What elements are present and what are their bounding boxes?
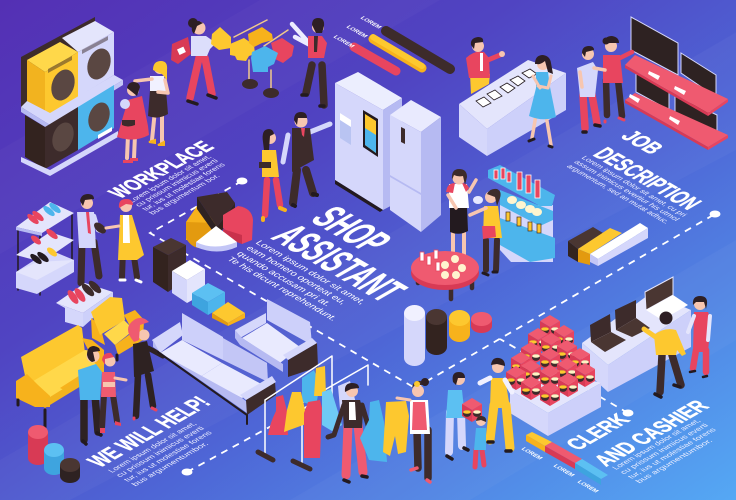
endpoint dots [182, 178, 720, 476]
workplace paragraph: cu prissum inimicus everti [133, 157, 221, 208]
pie chart [186, 192, 253, 252]
shoe salesman and customer [77, 194, 144, 283]
top colour bars with labels [331, 16, 450, 71]
assistant with apron [397, 378, 430, 482]
shoe rack [16, 201, 74, 295]
workplace heading: WORKPLACE [103, 138, 219, 202]
we will help paragraph: cu prissum inimicus everti [114, 425, 207, 479]
TV shelves [625, 17, 728, 150]
shop assistant paragraph: eam homero oporteat eu, [244, 244, 349, 306]
person with bags at clothes rack [171, 18, 231, 104]
dashed connector lines [150, 181, 715, 472]
shop assistant heading: ASSISTANT [261, 218, 416, 308]
helping assistant and couple [78, 318, 163, 444]
shop assistant heading [261, 200, 416, 308]
bottom colour bar with labels: LOREM [575, 480, 599, 494]
clerk group [446, 358, 512, 467]
people: women at washers [117, 61, 168, 163]
workplace paragraph: tur, ius ut molestiae forens [140, 161, 227, 212]
shop assistant paragraph: Lorem ipsum dolor sit amet, [253, 239, 368, 306]
bottom colour bar with labels: LOREM [551, 464, 575, 478]
couple at refrigerators [259, 112, 330, 220]
cashier people [644, 296, 711, 397]
yellow sofa [16, 325, 104, 427]
clerk and cashier paragraph: bus argumentumbor. [633, 437, 715, 485]
we will help paragraph: Lorem ipsum dolor sit amet, [106, 420, 199, 474]
cylinder chart [404, 305, 492, 366]
job description paragraph: assum inimicus evertiur his utmol [572, 159, 682, 222]
job description paragraph: argumentum, sed an mutat adhuc. [565, 163, 672, 225]
job description heading: JOB [616, 126, 669, 158]
clerk and cashier paragraph: cu prissum inimicus everti [618, 422, 711, 476]
phone seller and customer [466, 37, 556, 147]
customers at TV shelves [577, 36, 632, 132]
refrigerators [335, 72, 441, 232]
bottom colour bar with labels: LOREM [519, 447, 543, 461]
we will help paragraph: bus argumentumbor. [129, 440, 211, 488]
shop assistant heading: SHOP [300, 200, 402, 259]
3D box chart [153, 238, 245, 326]
workplace paragraph: Lorem ipsum dolor sit amet, [126, 153, 213, 204]
bottom colour bar with labels [519, 432, 608, 494]
cosmetics assistant and customer [446, 169, 502, 275]
shoe display table [56, 279, 113, 327]
man in red vest [292, 18, 327, 106]
blue dress and yellow trousers on hanger [360, 400, 409, 462]
top colour bars with labels: LOREM [331, 35, 355, 49]
workplace paragraph: bus argumentum bor. [147, 172, 222, 216]
clerk and cashier paragraph: Lorem ipsum dolor sit amet, [610, 417, 703, 471]
yellow armchair [91, 297, 144, 360]
shop assistant paragraph: quando accusam pri at. [234, 250, 334, 308]
phone display table [459, 60, 566, 156]
clerk and cashier paragraph: tur, ius ut molestiae forens [626, 426, 718, 480]
clerk and cashier heading [560, 396, 715, 470]
job description paragraph: Lorem ipsum dolor sit amet, cu pri [579, 154, 690, 218]
lilac sofas [152, 299, 318, 424]
shopper with jacket [328, 383, 368, 482]
clothes racks [258, 356, 368, 469]
clerk and cashier heading: CLERK [560, 410, 635, 454]
gift box pyramid on pedestal [506, 315, 601, 436]
cylinder stack bottom left [28, 425, 80, 483]
right 3D bars [568, 223, 648, 266]
round table with products [411, 250, 479, 299]
shop assistant paragraph: Te his dicunt reprehendunt. [225, 255, 340, 322]
top colour bars with labels: LOREM [344, 25, 368, 39]
cosmetics shelves [488, 165, 555, 262]
we will help heading: WE WILL HELP! [82, 393, 217, 471]
washing machines on shelves [21, 17, 123, 176]
we will help paragraph: tur, ius ut molestiae forens [122, 429, 214, 483]
job description heading [587, 126, 707, 214]
top colour bars with labels: LOREM [358, 16, 382, 30]
clothes rail displays [230, 20, 294, 98]
laptop counter [582, 277, 691, 392]
